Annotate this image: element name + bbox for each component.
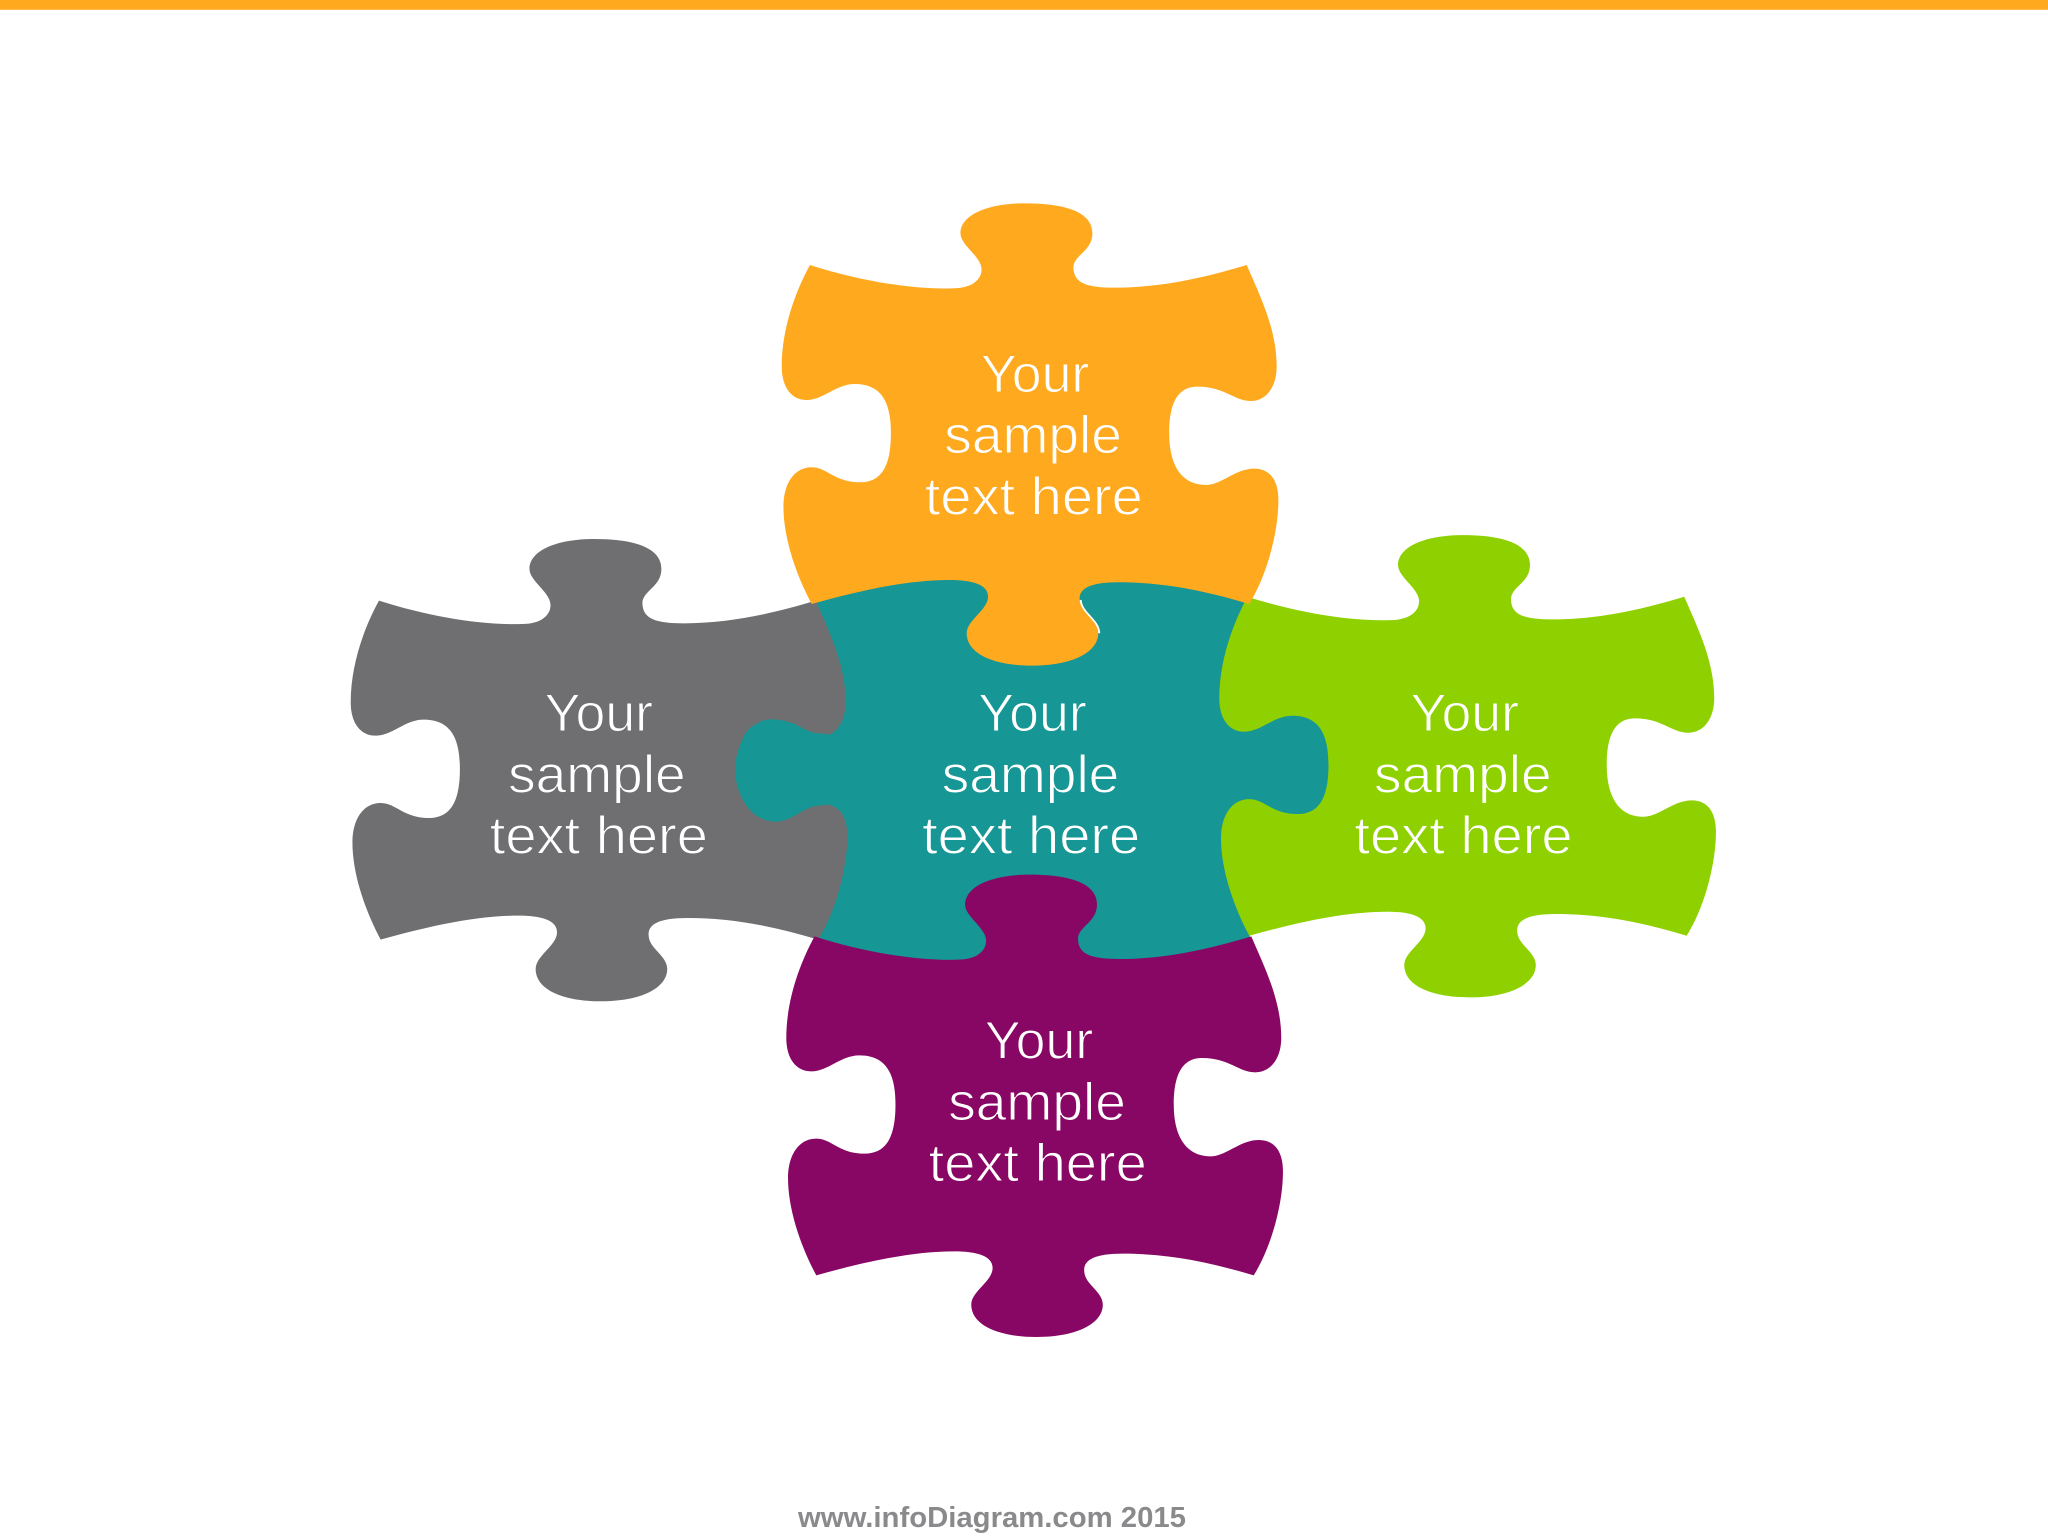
teal left tab [735, 719, 832, 822]
text: centre piece label [922, 684, 1140, 865]
text: centre piece label: sample [942, 745, 1119, 804]
text: bottom piece label: sample [948, 1073, 1126, 1132]
text: top piece label: text here [925, 467, 1143, 526]
text: right piece label: Your [1411, 684, 1519, 743]
text: top piece label: sample [944, 406, 1122, 465]
text: top piece label: Your [981, 345, 1089, 404]
text: left piece label: sample [508, 745, 686, 804]
text: right piece label [1354, 684, 1573, 865]
text: centre piece label: Your [978, 684, 1087, 743]
puzzle piece: bottom purple [786, 875, 1283, 1337]
text: left piece label: Your [545, 684, 653, 743]
puzzle piece: top orange [782, 203, 1278, 666]
text: bottom piece label [929, 1012, 1147, 1193]
text: top piece label [925, 345, 1143, 526]
text: bottom piece label: text here [929, 1134, 1147, 1193]
text: left piece label [490, 684, 708, 865]
footer credit: www.infoDiagram.com 2015 [797, 1502, 1186, 1534]
top accent bar [0, 0, 2048, 10]
puzzle piece: right green [1219, 535, 1716, 997]
text: right piece label: text here [1354, 806, 1573, 865]
puzzle piece: left grey [351, 539, 847, 1001]
puzzle piece: centre teal [725, 575, 1345, 973]
text: left piece label: text here [490, 806, 708, 865]
text: bottom piece label: Your [985, 1012, 1093, 1071]
text: right piece label: sample [1374, 745, 1552, 804]
text: centre piece label: text here [922, 806, 1140, 865]
